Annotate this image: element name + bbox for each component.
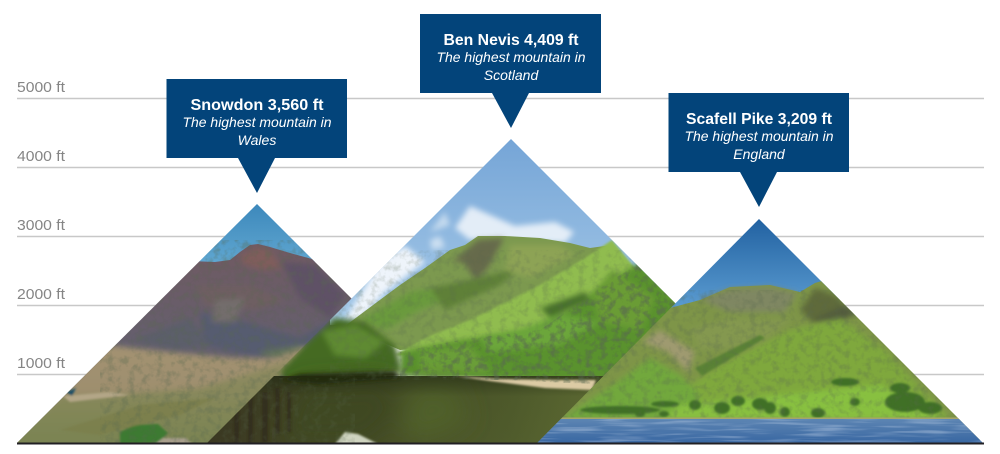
callout: Scafell Pike: England: [733, 146, 786, 162]
altitude gridlines: [17, 98, 984, 374]
y-axis altitude labels: 5000 ft: [17, 80, 65, 96]
callout: Snowdon: [166, 79, 347, 193]
mountain triangle: Snowdon photo: [18, 204, 352, 442]
y-axis altitude labels: 3000 ft: [17, 218, 65, 234]
callout: Ben Nevis: Ben Nevis 4,409 ft: [444, 32, 579, 49]
baseline: [17, 442, 984, 444]
callout: Scafell Pike: [668, 93, 849, 207]
y-axis altitude labels: 4000 ft: [17, 149, 65, 165]
y-axis altitude labels: [17, 80, 65, 372]
y-axis altitude labels: 2000 ft: [17, 287, 65, 303]
callout: Snowdon: The highest mountain in: [182, 114, 332, 130]
callout: Ben Nevis: Scotland: [484, 67, 539, 83]
callout: Scafell Pike: The highest mountain in: [684, 128, 834, 144]
callout: Scafell Pike: Scafell Pike 3,209 ft: [686, 111, 833, 128]
y-axis altitude labels: 1000 ft: [17, 356, 65, 372]
mountain triangle: Scafell Pike photo: [530, 215, 1000, 445]
mountain triangle: Ben Nevis photo: [200, 135, 690, 446]
callout: Ben Nevis: The highest mountain in: [436, 49, 586, 65]
callout: Snowdon: Snowdon 3,560 ft: [190, 97, 324, 114]
callout: Snowdon: Wales: [238, 132, 276, 148]
callout: Ben Nevis: [420, 14, 601, 128]
